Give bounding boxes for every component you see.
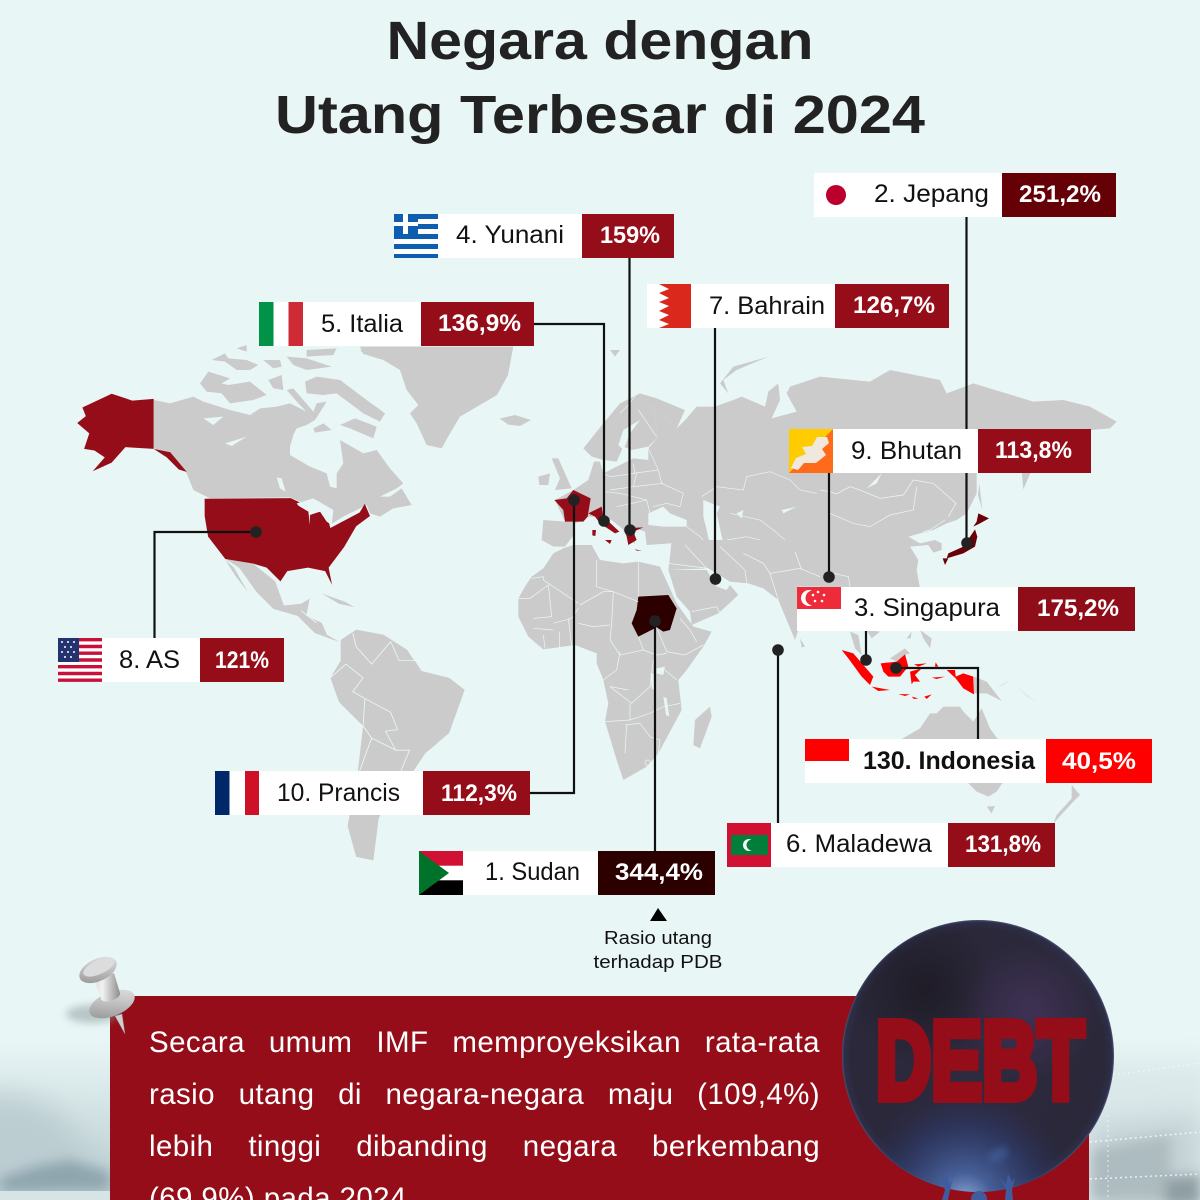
label: 130. Indonesia: 130. Indonesia (863, 747, 1036, 775)
map: united states (77, 394, 370, 585)
connector lines and dots (154, 217, 978, 851)
label: 2. Jepang: 2. Jepang (874, 180, 989, 208)
label: 5. Italia: 5. Italia (321, 310, 403, 338)
map: canada and greenland (154, 345, 531, 527)
label: 1. Sudan (419, 851, 715, 895)
text block: IMF summary: rasio utang di negara-negara maju (109,4%) (149, 1078, 820, 1111)
map: europe borders (603, 393, 817, 550)
label: 6. Maladewa (727, 823, 1055, 867)
label: 3. Singapura: 175,2% (1037, 595, 1119, 622)
label: 5. Italia (259, 302, 534, 346)
map: canadian and great lakes (203, 417, 333, 525)
map: indonesia (842, 650, 974, 699)
map: africa, arabia, india (518, 540, 820, 780)
label: 10. Prancis: 112,3% (441, 780, 517, 807)
label: 130. Indonesia (805, 739, 1152, 783)
label: 9. Bhutan: 113,8% (995, 437, 1072, 464)
label: 8. AS: 121% (215, 647, 269, 674)
label: 130. Indonesia: 40,5% (1062, 748, 1136, 775)
map: japan (943, 513, 989, 565)
label: 6. Maladewa: 6. Maladewa (786, 830, 932, 858)
map: highlighted europe (554, 490, 643, 551)
label: 2. Jepang (814, 173, 1116, 217)
text block: IMF summary: Secara umum IMF memproyeksikan rata-rata (149, 1026, 820, 1059)
map: east asia borders (820, 480, 956, 587)
map: southeast asia and australia (850, 630, 1080, 823)
legend: debt ratio note: Rasio utang (604, 927, 712, 948)
map: mexico, caribbean, south america (225, 559, 465, 860)
label: 10. Prancis (215, 771, 530, 815)
title (275, 11, 925, 145)
map: europe and western asia (538, 350, 820, 550)
legend: debt ratio note (594, 908, 722, 972)
label: 1. Sudan: 344,4% (615, 859, 703, 886)
label: 7. Bahrain: 7. Bahrain (709, 292, 825, 320)
label: 9. Bhutan (789, 429, 1091, 473)
label: 7. Bahrain (647, 284, 949, 328)
title: Negara dengan (386, 11, 814, 71)
label: 2. Jepang: 251,2% (1019, 181, 1101, 208)
text block: IMF summary: lebih tinggi dibanding negara berkembang (149, 1130, 820, 1163)
label: 7. Bahrain: 126,7% (853, 292, 935, 319)
map: sudan (632, 595, 677, 637)
label: 5. Italia: 136,9% (438, 310, 521, 337)
map: africa and south asia borders (518, 545, 820, 765)
title: Utang Terbesar di 2024 (275, 85, 925, 145)
label: 4. Yunani (394, 214, 674, 258)
label: 3. Singapura: 3. Singapura (854, 594, 1000, 622)
legend: debt ratio note: terhadap PDB (594, 951, 722, 972)
icon: push pin (66, 952, 139, 1034)
label: 4. Yunani: 4. Yunani (456, 221, 564, 249)
map: african lakes (651, 667, 669, 717)
label: 10. Prancis: 10. Prancis (277, 779, 400, 807)
map: inland seas (612, 420, 797, 545)
panel: summary background (110, 996, 1089, 1200)
label: 8. AS (58, 638, 284, 682)
label: 8. AS: 8. AS (119, 646, 180, 674)
map: east asia (820, 370, 1117, 588)
label: 9. Bhutan: 9. Bhutan (851, 437, 962, 465)
label: 3. Singapura (797, 587, 1135, 631)
icon: debt wrecking ball (842, 920, 1114, 1200)
map: south america and mexico borders (301, 611, 415, 771)
map: lake baikal (867, 473, 882, 488)
icon: debt wrecking ball: DEBT (876, 1000, 1084, 1122)
label: 4. Yunani: 159% (600, 222, 660, 249)
background chart detail right (1090, 1063, 1200, 1200)
label: 6. Maladewa: 131,8% (965, 831, 1041, 858)
label: 1. Sudan: 1. Sudan (485, 858, 580, 886)
world map (77, 345, 1117, 860)
text block: IMF summary (149, 1026, 820, 1200)
